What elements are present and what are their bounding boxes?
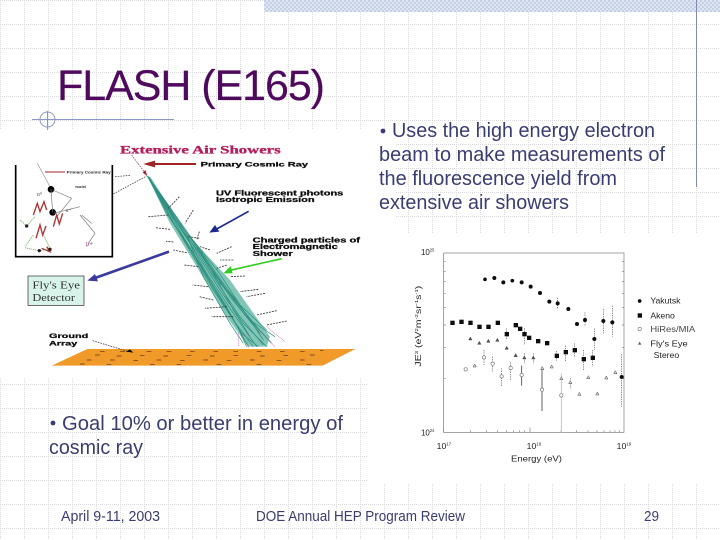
- fly's eye detector box: [28, 276, 84, 305]
- axis labels: 10: [617, 441, 626, 451]
- text block: uses: [379, 119, 665, 214]
- ground array: Ground: [49, 333, 88, 340]
- series: akeno: [450, 320, 595, 361]
- shower inset panel: π⁰: [37, 192, 42, 198]
- shower inset panel: π⁺: [65, 208, 72, 214]
- footer: event: DOE Annual HEP Program Review: [256, 509, 465, 525]
- axis labels: 18: [536, 442, 542, 447]
- axis labels: 2: [414, 328, 420, 332]
- icon: title rule with circle: [32, 111, 174, 130]
- legend: Fly's Eye: [650, 338, 688, 348]
- axis labels: Energy (eV): [511, 454, 562, 464]
- series: yakutsk: [483, 276, 624, 379]
- shower inset panel: μ+: [86, 241, 93, 247]
- error bars: [484, 298, 622, 407]
- fluorescent photon dashes: [148, 197, 287, 325]
- text block: uses: beam to make measurements of: [379, 143, 665, 166]
- axis labels: -2: [414, 314, 420, 319]
- text block: uses: the fluorescence yield from: [379, 167, 617, 190]
- legend: Stereo: [654, 350, 679, 360]
- axis labels: (eV: [413, 331, 423, 351]
- label: uv fluorescent photons: [209, 190, 344, 233]
- shower inset panel: Primary Cosmic Ray: [67, 170, 112, 174]
- fly's eye arrow: [87, 252, 169, 281]
- axis labels: 17: [446, 442, 452, 447]
- fly's eye detector box: Detector: [32, 293, 76, 304]
- right vertical rule: [696, 0, 697, 187]
- chart: energy spectrum: [367, 234, 720, 483]
- label: uv fluorescent photons: UV Fluorescent photons: [216, 190, 344, 197]
- legend: Akeno: [650, 310, 675, 320]
- label: charged particles: Charged particles of: [253, 237, 361, 244]
- axis labels: 10: [527, 441, 536, 451]
- diagram: extensive air showers: [0, 130, 396, 377]
- legend: Yakutsk: [650, 296, 681, 306]
- primary ray arrow: Primary Cosmic Ray: [201, 162, 308, 169]
- axis labels: sr: [413, 305, 423, 314]
- chart frame and ticks: [444, 253, 624, 432]
- shower lower scatter: [238, 327, 285, 348]
- axis labels: m: [413, 319, 423, 328]
- inset leader lines: [113, 175, 147, 194]
- axis labels: 10: [437, 441, 446, 451]
- legend: [638, 296, 696, 360]
- text block: uses: Uses the high energy electron: [392, 119, 655, 142]
- axis labels: -1: [414, 300, 420, 305]
- fly's eye detector box: Fly's Eye: [32, 281, 81, 292]
- text block: goal: Goal 10% or better in energy of: [62, 412, 343, 435]
- label: charged particles: Electromagnetic: [253, 244, 338, 251]
- axis labels: 19: [626, 442, 632, 447]
- diagram heading: Extensive Air Showers: [120, 143, 281, 156]
- primary ray arrow: [132, 155, 308, 176]
- shower particle tracks: [147, 176, 275, 347]
- text block: uses: extensive air showers: [379, 191, 569, 214]
- axis labels: 10: [421, 247, 431, 257]
- text block: goal: cosmic ray: [49, 436, 144, 459]
- label: uv fluorescent photons: Isotropic Emission: [216, 197, 315, 204]
- axis labels: 24: [430, 428, 435, 433]
- series: fly's eye stereo: [469, 337, 617, 395]
- text block: goal: [49, 412, 343, 459]
- title: FLASH (E165): [57, 62, 325, 110]
- axis labels: 3: [414, 351, 420, 354]
- axis labels: -1: [414, 289, 420, 295]
- ground array: [49, 333, 355, 366]
- label: charged particles: Shower: [253, 251, 293, 258]
- label: charged particles: [223, 237, 361, 273]
- series: hires mia: [464, 356, 563, 397]
- legend: HiRes/MIA: [650, 324, 696, 334]
- footer: page number: 29: [644, 509, 659, 525]
- axis labels: JE: [413, 357, 423, 367]
- axis labels: [413, 247, 632, 464]
- top decorative band: [264, 0, 720, 12]
- axis labels: 10: [421, 427, 431, 437]
- shower inset panel: nuclei: [75, 185, 86, 189]
- axis labels: 25: [430, 248, 435, 253]
- axis labels: s: [413, 294, 423, 300]
- shower inset panel: [16, 163, 112, 257]
- ground array: Array: [49, 340, 78, 347]
- axis labels: ): [413, 286, 423, 289]
- footer: date: April 9-11, 2003: [61, 509, 160, 525]
